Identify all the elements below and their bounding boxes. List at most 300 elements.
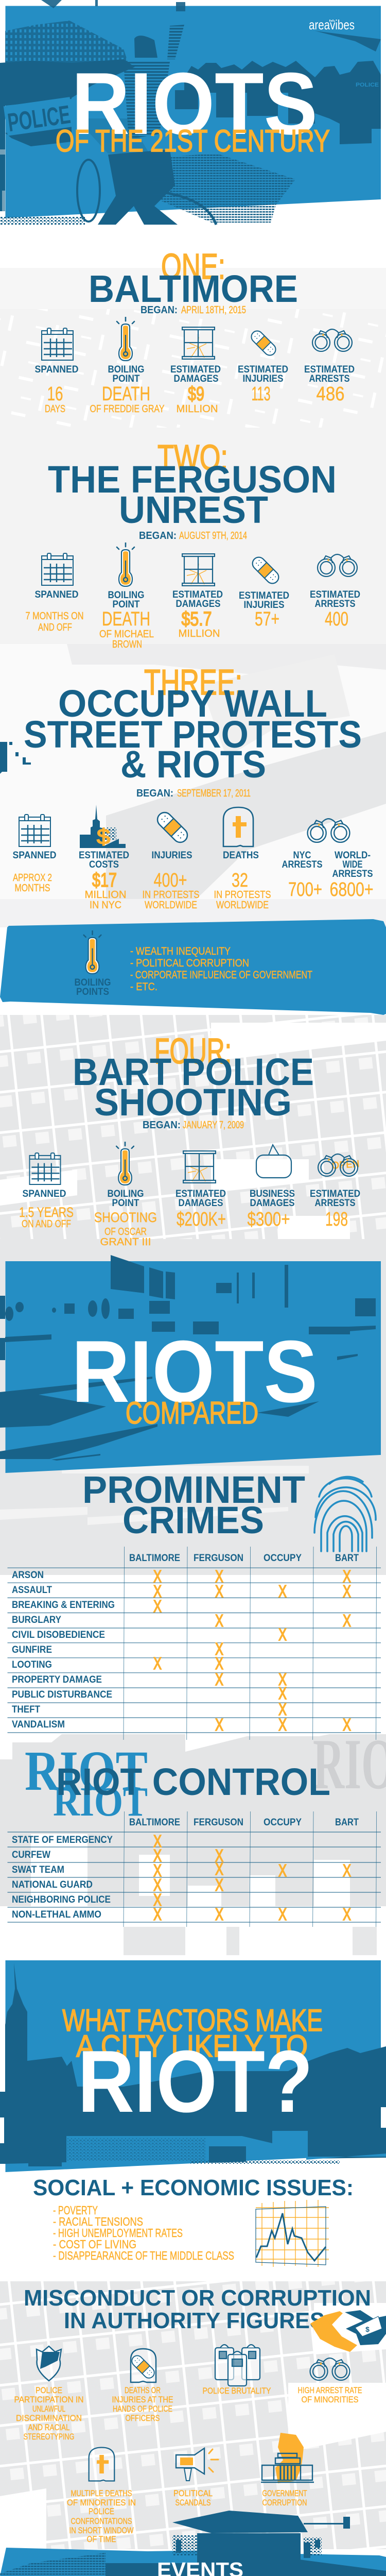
caption: government corruption — [262, 2488, 307, 2507]
caption: government corruption: CORRUPTION — [262, 2498, 307, 2507]
icon: police badge — [37, 2346, 61, 2381]
stat: NYC arrests — [282, 850, 322, 901]
stat: estimated damages: MILLION — [176, 403, 218, 415]
heading two: TWO: — [157, 437, 228, 478]
list of issues: - RACIAL TENSIONS — [53, 2215, 143, 2228]
began date: JANUARY 7, 2009 — [183, 1120, 244, 1131]
stat: boiling point: DEATH — [102, 608, 150, 630]
list of issues: - POVERTY — [53, 2204, 98, 2217]
events wavy blue band — [0, 2548, 386, 2576]
row labels: VANDALISM — [12, 1719, 65, 1730]
row labels: STATE OF EMERGENCY — [12, 1835, 113, 1845]
boiling points label: POINTS — [76, 987, 109, 997]
panel: riots compared banner — [0, 1255, 381, 1473]
stat: estimated arrests: ARRESTS — [309, 374, 350, 384]
icon: calendar — [42, 328, 73, 360]
hero police vest labels: POLICE — [356, 82, 379, 88]
icon: handshake with money: $ — [365, 2325, 370, 2333]
icon: handcuffs — [310, 2358, 350, 2380]
stat: estimated injuries: INJURIES — [244, 600, 284, 611]
stat: estimated damages — [176, 1189, 226, 1230]
list of issues: - HIGH UNEMPLOYMENT RATES — [53, 2226, 183, 2240]
icon: handshake with money — [310, 2310, 386, 2352]
stat: estimated damages: MILLION — [178, 628, 220, 639]
icon: bandage — [250, 555, 281, 586]
row labels: BREAKING & ENTERING — [12, 1600, 115, 1611]
stat: estimated arrests: ESTIMATED — [310, 1189, 360, 1199]
X marks: X — [153, 1832, 162, 1851]
heading three: THREE: — [144, 662, 242, 702]
icon: riot shields — [215, 2345, 260, 2386]
heading the Ferguson unrest: THE FERGUSON — [48, 458, 337, 501]
icon: bandage — [249, 329, 278, 358]
stat: estimated costs: MILLION — [84, 889, 127, 901]
began date — [143, 1120, 244, 1131]
caption: political scandals — [173, 2488, 213, 2507]
stat: spanned: SPANNED — [12, 850, 57, 861]
subtitle compared: COMPARED — [126, 1396, 258, 1430]
row labels: NEIGHBORING POLICE — [12, 1894, 111, 1905]
row labels: NATIONAL GUARD — [12, 1879, 93, 1890]
stat: estimated damages — [172, 589, 223, 639]
X marks: X — [215, 1859, 223, 1878]
icon: handcuffs — [308, 819, 349, 842]
stat: estimated damages: ESTIMATED — [172, 589, 223, 600]
icon: calendar — [42, 553, 73, 585]
began date: BEGAN: — [143, 1120, 181, 1131]
stat: spanned: SPANNED — [35, 364, 78, 375]
stat: NYC arrests: 700+ — [288, 879, 322, 901]
stat: business damages: BUSINESS — [250, 1189, 295, 1199]
table: prominent crimes comparison — [7, 1547, 381, 1740]
stat: injuries: 400+ — [153, 870, 187, 891]
icon: thermometer — [117, 317, 134, 361]
stat: boiling point: BOILING — [108, 590, 144, 601]
X marks: X — [278, 1582, 287, 1601]
row labels: PROPERTY DAMAGE — [12, 1674, 102, 1685]
stat: spanned: 16 — [47, 383, 63, 405]
list of boiling points — [130, 945, 312, 993]
X marks: X — [278, 1625, 287, 1644]
section three: Occupy Wall Street — [0, 662, 374, 911]
icon: handcuffs — [318, 554, 357, 577]
stat: spanned: MONTHS — [14, 883, 50, 894]
stat: estimated injuries: ESTIMATED — [238, 364, 288, 375]
began date: APRIL 18TH, 2015 — [181, 304, 246, 316]
heading prominent crimes: PROMINENT — [82, 1468, 305, 1511]
stat: estimated costs — [79, 850, 129, 911]
table header: BALTIMORE — [129, 1553, 180, 1564]
section: riot control — [7, 1724, 386, 1927]
stat: boiling point — [99, 590, 154, 650]
heading: MISCONDUCT OR CORRUPTION — [24, 2285, 371, 2311]
stat: estimated costs: $17 — [92, 870, 117, 891]
heading: IN AUTHORITY FIGURES: — [64, 2308, 332, 2333]
stat: business damages — [247, 1189, 295, 1230]
stat: estimated arrests: 400 — [325, 608, 348, 630]
X marks: X — [153, 1654, 162, 1673]
icon: fingerprint — [314, 1477, 376, 1551]
began date — [136, 788, 251, 799]
X marks: X — [153, 1861, 162, 1880]
table header: BART — [335, 1553, 359, 1564]
heading Occupy Wall Street protests and riots: OCCUPY WALL — [58, 682, 327, 725]
caption: multiple deaths: IN SHORT WINDOW — [69, 2526, 134, 2535]
table header: FERGUSON — [194, 1817, 243, 1828]
stat: estimated damages: DAMAGES — [176, 599, 220, 609]
list of boiling points: - WEALTH INEQUALITY — [130, 945, 231, 957]
icon: bandage — [154, 809, 190, 845]
caption: police discrimination: AND RACIAL — [28, 2422, 70, 2432]
stat: worldwide arrests — [329, 850, 374, 901]
stat: boiling point: POINT — [112, 599, 140, 610]
stat: injuries: WORLDWIDE — [145, 900, 197, 911]
icon: broken window — [182, 327, 215, 359]
stat: deaths: IN PROTESTS — [214, 889, 271, 901]
X marks: X — [343, 1715, 351, 1734]
icon: tombstone with bandage — [130, 2349, 156, 2382]
stat: estimated arrests: 198 — [325, 1209, 348, 1230]
stat: boiling point — [90, 364, 165, 415]
panel: boiling points — [0, 919, 386, 1015]
boiling points label — [74, 977, 111, 997]
X marks: X — [153, 1846, 162, 1865]
X marks — [153, 1567, 351, 1734]
began date: SEPTEMBER 17, 2011 — [177, 788, 251, 799]
stat: estimated arrests — [310, 589, 360, 630]
boiling points label: BOILING — [74, 977, 111, 988]
caption: police discrimination: UNLAWFUL — [32, 2404, 65, 2414]
table header: BALTIMORE — [129, 1817, 180, 1828]
icon: calendar — [29, 1153, 61, 1184]
icon: thermometer — [117, 543, 134, 586]
row labels: ARSON — [12, 1570, 44, 1581]
title RIOTS: RIOTS — [72, 1323, 318, 1421]
X marks: X — [343, 1861, 351, 1880]
caption: deaths or injuries: DEATHS OR — [125, 2385, 161, 2395]
X marks: X — [278, 1715, 287, 1734]
icon: tombstone — [223, 807, 253, 846]
caption: deaths or injuries: INJURIES AT THE — [112, 2395, 173, 2404]
X marks: X — [215, 1670, 223, 1689]
stat: estimated costs: COSTS — [89, 859, 119, 870]
heading prominent crimes: CRIMES — [122, 1499, 264, 1541]
heading BART police shooting: BART POLICE — [73, 1050, 314, 1093]
row labels: CIVIL DISOBEDIENCE — [12, 1630, 105, 1640]
decorative grunge riot words: RIOT — [25, 1739, 148, 1802]
stat: spanned: 1.5 YEARS — [19, 1205, 74, 1220]
caption: government corruption: GOVERNMENT — [262, 2488, 307, 2498]
row labels: GUNFIRE — [12, 1645, 52, 1655]
stat: spanned — [12, 850, 57, 894]
caption: police discrimination: PARTICIPATION IN — [14, 2395, 83, 2404]
began date: AUGUST 9TH, 2014 — [179, 530, 247, 541]
stat: estimated arrests — [304, 364, 355, 405]
stat: deaths: DEATHS — [223, 850, 259, 861]
stat: estimated injuries — [238, 364, 288, 405]
heading: SOCIAL + ECONOMIC ISSUES: — [33, 2175, 354, 2200]
icon: handcuffs — [318, 1154, 358, 1176]
heading four: FOUR: — [154, 1031, 232, 1071]
stat: estimated damages: $200K+ — [177, 1209, 226, 1230]
list of issues: - COST OF LIVING — [53, 2238, 136, 2251]
stat: estimated arrests: ESTIMATED — [310, 589, 360, 600]
stat: worldwide arrests: WORLD- — [335, 850, 371, 861]
X marks: X — [343, 1611, 351, 1630]
caption: political scandals: POLITICAL — [173, 2488, 213, 2498]
stat: estimated arrests — [310, 1189, 360, 1230]
X marks: X — [215, 1611, 223, 1630]
stat: spanned: SPANNED — [23, 1189, 66, 1199]
X marks: X — [215, 1567, 223, 1586]
X marks: X — [153, 1597, 162, 1616]
stat: boiling point: GRANT III — [100, 1236, 151, 1248]
stat: boiling point: BOILING — [108, 364, 144, 375]
X marks: X — [215, 1582, 223, 1601]
X marks: X — [278, 1861, 287, 1880]
row labels: LOOTING — [12, 1659, 52, 1670]
panel: what factors make a city likely to riot banner — [0, 1960, 386, 2172]
stat: business damages: $300+ — [247, 1209, 290, 1230]
stat: boiling point: OF FREDDIE GRAY — [90, 403, 165, 415]
decorative grunge riot words — [25, 1724, 386, 1825]
hero photo police sign — [4, 97, 74, 138]
title RIOTS: RIOTS — [72, 55, 318, 153]
X marks: X — [278, 1700, 287, 1719]
stat: spanned: ON AND OFF — [22, 1218, 71, 1230]
X marks: X — [215, 1875, 223, 1894]
row labels: BURGLARY — [12, 1615, 61, 1625]
stat: estimated injuries: INJURIES — [243, 374, 283, 384]
section: prominent crimes — [7, 1468, 381, 1740]
stat: spanned: AND OFF — [38, 622, 72, 633]
caption: high arrest rate: OF MINORITIES — [302, 2395, 358, 2404]
began date — [141, 304, 246, 316]
row labels: NON-LETHAL AMMO — [12, 1909, 101, 1920]
stat: estimated injuries: ESTIMATED — [239, 590, 289, 601]
X marks: X — [215, 1905, 223, 1924]
caption: multiple deaths — [67, 2488, 136, 2544]
caption: police discrimination: POLICE — [36, 2385, 62, 2395]
table header — [129, 1553, 359, 1564]
stat: injuries: IN PROTESTS — [142, 889, 200, 901]
X marks: X — [215, 1639, 223, 1658]
stat: spanned — [26, 589, 83, 633]
table header: OCCUPY — [264, 1817, 302, 1828]
began date: BEGAN: — [139, 530, 177, 541]
stat: worldwide arrests: 6800+ — [329, 879, 374, 901]
heading BART police shooting: SHOOTING — [94, 1081, 292, 1124]
caption: high arrest rate: HIGH ARREST RATE — [297, 2385, 362, 2395]
panel: events — [0, 2511, 386, 2576]
stat: business damages: DAMAGES — [250, 1198, 294, 1209]
list of boiling points: - CORPORATE INFLUENCE OF GOVERNMENT — [130, 969, 312, 981]
icon: megaphone — [176, 2448, 218, 2481]
X marks: X — [215, 1654, 223, 1673]
X marks: X — [153, 1567, 162, 1586]
caption: multiple deaths: OF TIME — [86, 2534, 116, 2544]
banner blue background — [5, 1960, 381, 2172]
X marks: X — [343, 1567, 351, 1586]
stat: spanned: APPROX 2 — [13, 872, 52, 884]
icon: tombstone — [89, 2448, 114, 2481]
table grid — [7, 1811, 381, 1927]
began date — [139, 530, 247, 541]
row labels: ASSAULT — [12, 1585, 52, 1596]
row labels: PUBLIC DISTURBANCE — [12, 1689, 112, 1700]
list of boiling points: - POLITICAL CORRUPTION — [130, 957, 249, 969]
icon: thermometer — [84, 930, 101, 974]
caption: deaths or injuries: OFFICERS — [126, 2413, 160, 2423]
table header: FERGUSON — [194, 1553, 243, 1564]
row labels — [12, 1835, 113, 1920]
icon: handcuffs — [312, 329, 352, 351]
heading one: ONE: — [161, 246, 225, 286]
section two: Ferguson unrest — [26, 437, 360, 650]
row labels: CURFEW — [12, 1850, 50, 1860]
stat: deaths — [214, 850, 271, 911]
table: riot control comparison — [7, 1811, 381, 1927]
stat: boiling point: OF MICHAEL — [99, 629, 154, 640]
hero blue background — [5, 6, 381, 218]
icon: broken window — [182, 554, 215, 586]
began date: BEGAN: — [141, 304, 178, 316]
section: social and economic issues — [33, 2175, 354, 2267]
row labels: THEFT — [12, 1704, 40, 1715]
X marks: X — [215, 1846, 223, 1865]
heading prominent crimes — [82, 1468, 305, 1541]
banner street photo silhouettes — [0, 1255, 376, 1461]
X marks: X — [153, 1905, 162, 1924]
heading Baltimore: BALTIMORE — [89, 267, 298, 310]
caption: police discrimination — [14, 2385, 83, 2442]
stat: boiling point: SHOOTING — [94, 1210, 157, 1225]
caption: high arrest rate — [297, 2385, 362, 2404]
question line one and two: A CITY LIKELY TO — [76, 2029, 308, 2063]
X marks: X — [153, 1890, 162, 1909]
stat: estimated arrests: ESTIMATED — [304, 364, 355, 375]
stat: spanned: SPANNED — [35, 589, 78, 600]
icon: thermometer — [116, 1142, 134, 1185]
X marks: X — [343, 1905, 351, 1924]
stat: NYC arrests: ARRESTS — [282, 859, 322, 870]
icon: open sign: OPEN — [331, 1158, 360, 1172]
stat: NYC arrests: NYC — [293, 850, 311, 861]
banner blue background — [5, 1261, 381, 1473]
stat: spanned: DAYS — [45, 403, 65, 415]
stat: estimated damages — [170, 364, 221, 415]
stat: boiling point: POINT — [112, 374, 140, 384]
stat: spanned — [19, 1189, 74, 1230]
stat: estimated injuries: 57+ — [255, 608, 279, 630]
list of issues: - DISAPPEARANCE OF THE MIDDLE CLASS — [53, 2249, 234, 2262]
stat: estimated costs: ESTIMATED — [79, 850, 129, 861]
stat: spanned: 7 MONTHS ON — [26, 611, 83, 622]
hero protest photo silhouettes — [0, 0, 381, 225]
began date: BEGAN: — [136, 788, 173, 799]
panel: hero riots of the 21st century — [0, 0, 381, 225]
caption: police discrimination: DISCRIMINATION — [16, 2413, 82, 2423]
chart: hand-drawn declining line graph — [256, 2200, 329, 2267]
stat: boiling point: BOILING — [107, 1189, 144, 1199]
stat: boiling point — [94, 1189, 157, 1248]
caption: political scandals: SCANDALS — [175, 2498, 211, 2507]
decorative ink speckle — [0, 742, 31, 774]
caption: multiple deaths: POLICE — [89, 2506, 114, 2516]
caption: multiple deaths: OF MINORITIES IN — [67, 2498, 136, 2507]
row labels — [12, 1570, 115, 1730]
icon: city with dollar sign — [80, 805, 126, 849]
heading Occupy Wall Street protests and riots — [24, 682, 362, 786]
heading the Ferguson unrest: UNREST — [119, 488, 268, 531]
stat: estimated injuries — [239, 590, 289, 630]
heading — [24, 2285, 371, 2333]
caption: multiple deaths: MULTIPLE DEATHS — [71, 2488, 132, 2498]
caption: deaths or injuries: HANDS OF POLICE — [113, 2404, 172, 2414]
stat: boiling point: DEATH — [102, 383, 150, 405]
X marks: X — [278, 1905, 287, 1924]
stat: estimated arrests: ARRESTS — [315, 599, 355, 609]
icon: calendar — [19, 815, 50, 846]
stat: spanned — [35, 364, 78, 415]
X marks: X — [278, 1684, 287, 1703]
caption: multiple deaths: CONFRONTATIONS — [71, 2516, 132, 2526]
caption: police discrimination: STEREOTYPING — [24, 2432, 74, 2442]
heading riot control: RIOT CONTROL — [56, 1760, 330, 1803]
icon: broken window — [183, 1151, 216, 1183]
stat: deaths: 32 — [232, 870, 248, 891]
stat: boiling point: POINT — [112, 1198, 139, 1209]
X marks: X — [153, 1875, 162, 1894]
table header — [129, 1817, 359, 1828]
icon: open sign — [256, 1145, 360, 1178]
heading Occupy Wall Street protests and riots: STREET PROTESTS — [24, 713, 362, 756]
stat: estimated damages: ESTIMATED — [170, 364, 221, 375]
panel background — [0, 919, 386, 1015]
stat: worldwide arrests: ARRESTS — [332, 869, 373, 879]
row labels: SWAT TEAM — [12, 1865, 64, 1875]
list of boiling points: - ETC. — [130, 981, 157, 993]
X marks — [153, 1832, 351, 1924]
stat: boiling point: BROWN — [112, 639, 142, 650]
stat: estimated injuries: 113 — [251, 383, 271, 405]
section four: BART police shooting — [19, 1031, 360, 1248]
stat: boiling point: OF OSCAR — [104, 1226, 147, 1238]
list of issues — [53, 2204, 234, 2262]
X marks: X — [343, 1582, 351, 1601]
stat: estimated damages: DAMAGES — [174, 374, 218, 384]
stat: estimated arrests: ARRESTS — [315, 1198, 355, 1209]
stat: estimated arrests: 486 — [316, 383, 345, 405]
section: misconduct or corruption — [14, 2285, 386, 2544]
stat: estimated costs: IN NYC — [90, 900, 121, 911]
stat: injuries: INJURIES — [151, 850, 192, 861]
stat: injuries — [142, 850, 200, 911]
table header: BART — [335, 1817, 359, 1828]
decorative grunge riot words: RIOT — [53, 1780, 148, 1825]
logo: areavibes: areavibes — [309, 17, 355, 32]
X marks: X — [215, 1715, 223, 1734]
caption: deaths or injuries — [112, 2385, 173, 2423]
table grid — [7, 1547, 381, 1740]
stat: estimated damages: $9 — [188, 383, 204, 405]
caption: police brutality: POLICE BRUTALITY — [203, 2386, 271, 2396]
stat: worldwide arrests: WIDE — [343, 859, 362, 870]
stat: estimated damages: ESTIMATED — [176, 1189, 226, 1199]
icon: city with dollar sign: $ — [97, 824, 110, 849]
section one: Baltimore — [35, 246, 355, 415]
title RIOT?: RIOT? — [78, 2032, 313, 2131]
